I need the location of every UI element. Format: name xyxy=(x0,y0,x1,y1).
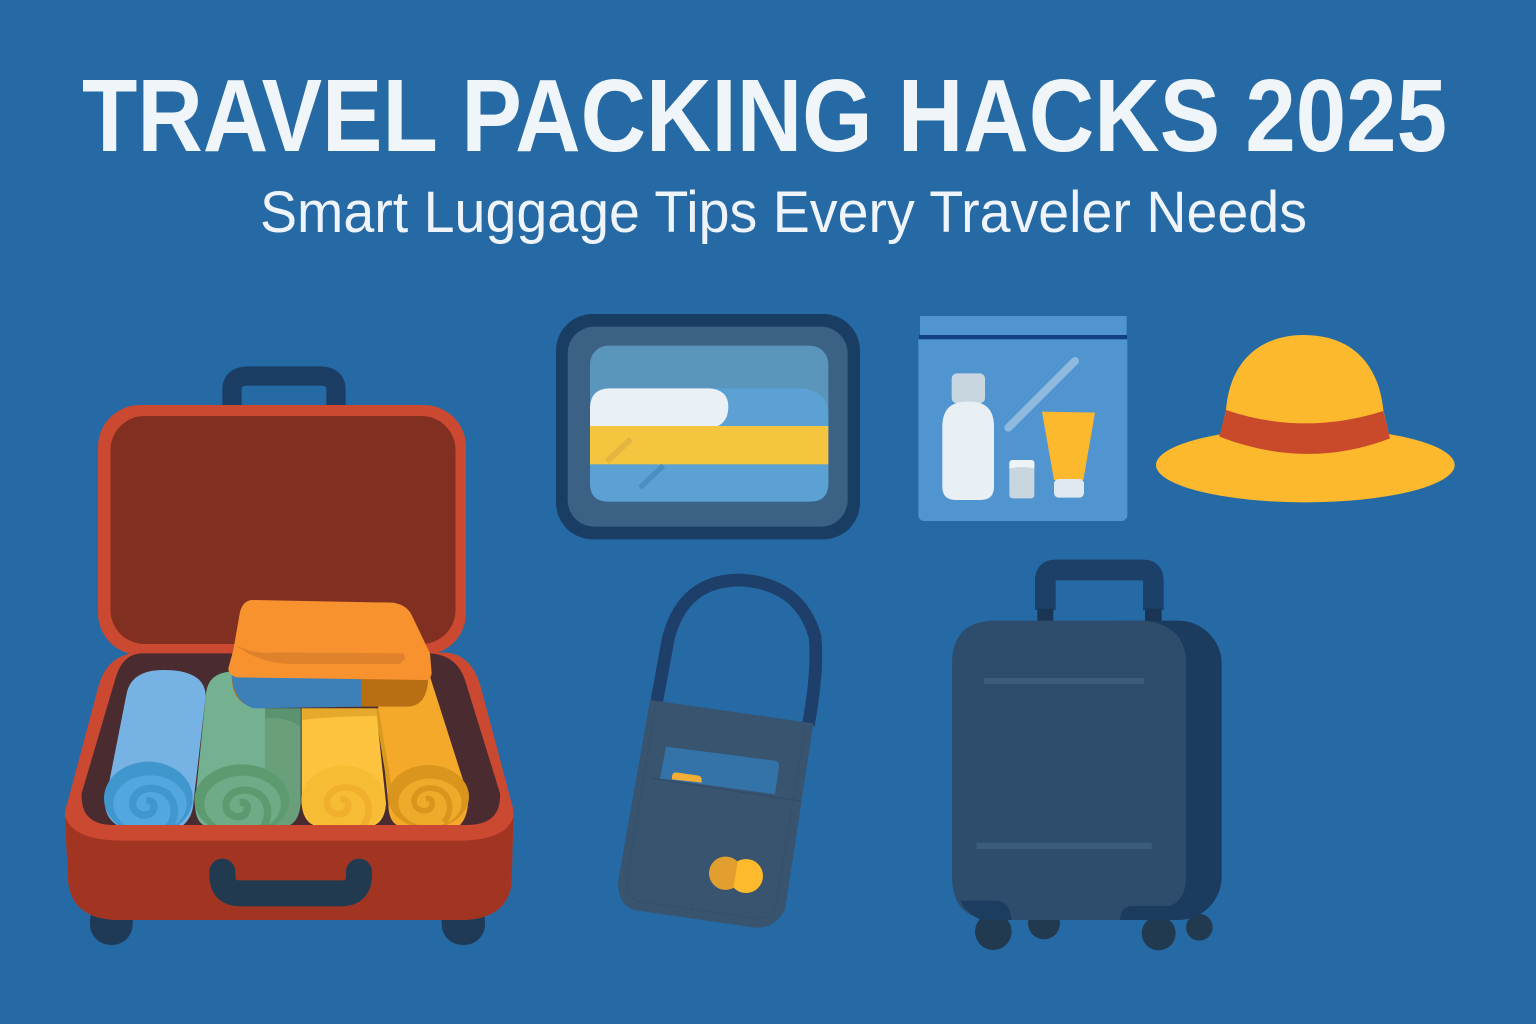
sunscreen tube xyxy=(1042,412,1095,498)
bag clasp xyxy=(709,857,763,893)
carry-on handle xyxy=(1037,570,1162,622)
bag pocket xyxy=(660,747,779,794)
suitcase lid xyxy=(98,405,466,655)
icon: crossbody bag xyxy=(618,580,816,928)
icon: toiletries bag xyxy=(918,316,1127,521)
bag strap xyxy=(657,580,816,725)
suitcase top handle xyxy=(232,376,336,407)
subtitle: Smart Luggage Tips Every Traveler Needs xyxy=(260,180,1307,245)
hat band xyxy=(1219,410,1390,454)
towel: green xyxy=(194,672,301,836)
carry-on front xyxy=(952,621,1186,920)
bag body xyxy=(618,700,813,928)
towel: orange xyxy=(375,677,469,828)
suitcase wheels xyxy=(90,900,485,945)
bag stitching xyxy=(627,707,805,918)
suitcase base rim xyxy=(65,653,513,920)
suitcase interior xyxy=(82,653,500,825)
small jar xyxy=(1009,460,1034,498)
icon: packing cube xyxy=(556,314,860,539)
suitcase front xyxy=(65,817,513,920)
icon: sun hat xyxy=(1156,335,1455,502)
icon: carry-on suitcase xyxy=(952,570,1222,950)
suitcase front handle xyxy=(222,872,359,893)
rolled towels xyxy=(104,670,469,836)
icon: open red suitcase with rolled clothes xyxy=(65,376,513,945)
towel: blue xyxy=(104,670,206,835)
towel: yellow xyxy=(301,708,386,834)
cube contents xyxy=(590,388,828,502)
carry-on wheels xyxy=(975,907,1213,950)
carry-on side xyxy=(1073,621,1222,920)
bottle xyxy=(942,373,994,500)
stick xyxy=(1008,361,1075,428)
folded clothes stack xyxy=(228,600,432,708)
